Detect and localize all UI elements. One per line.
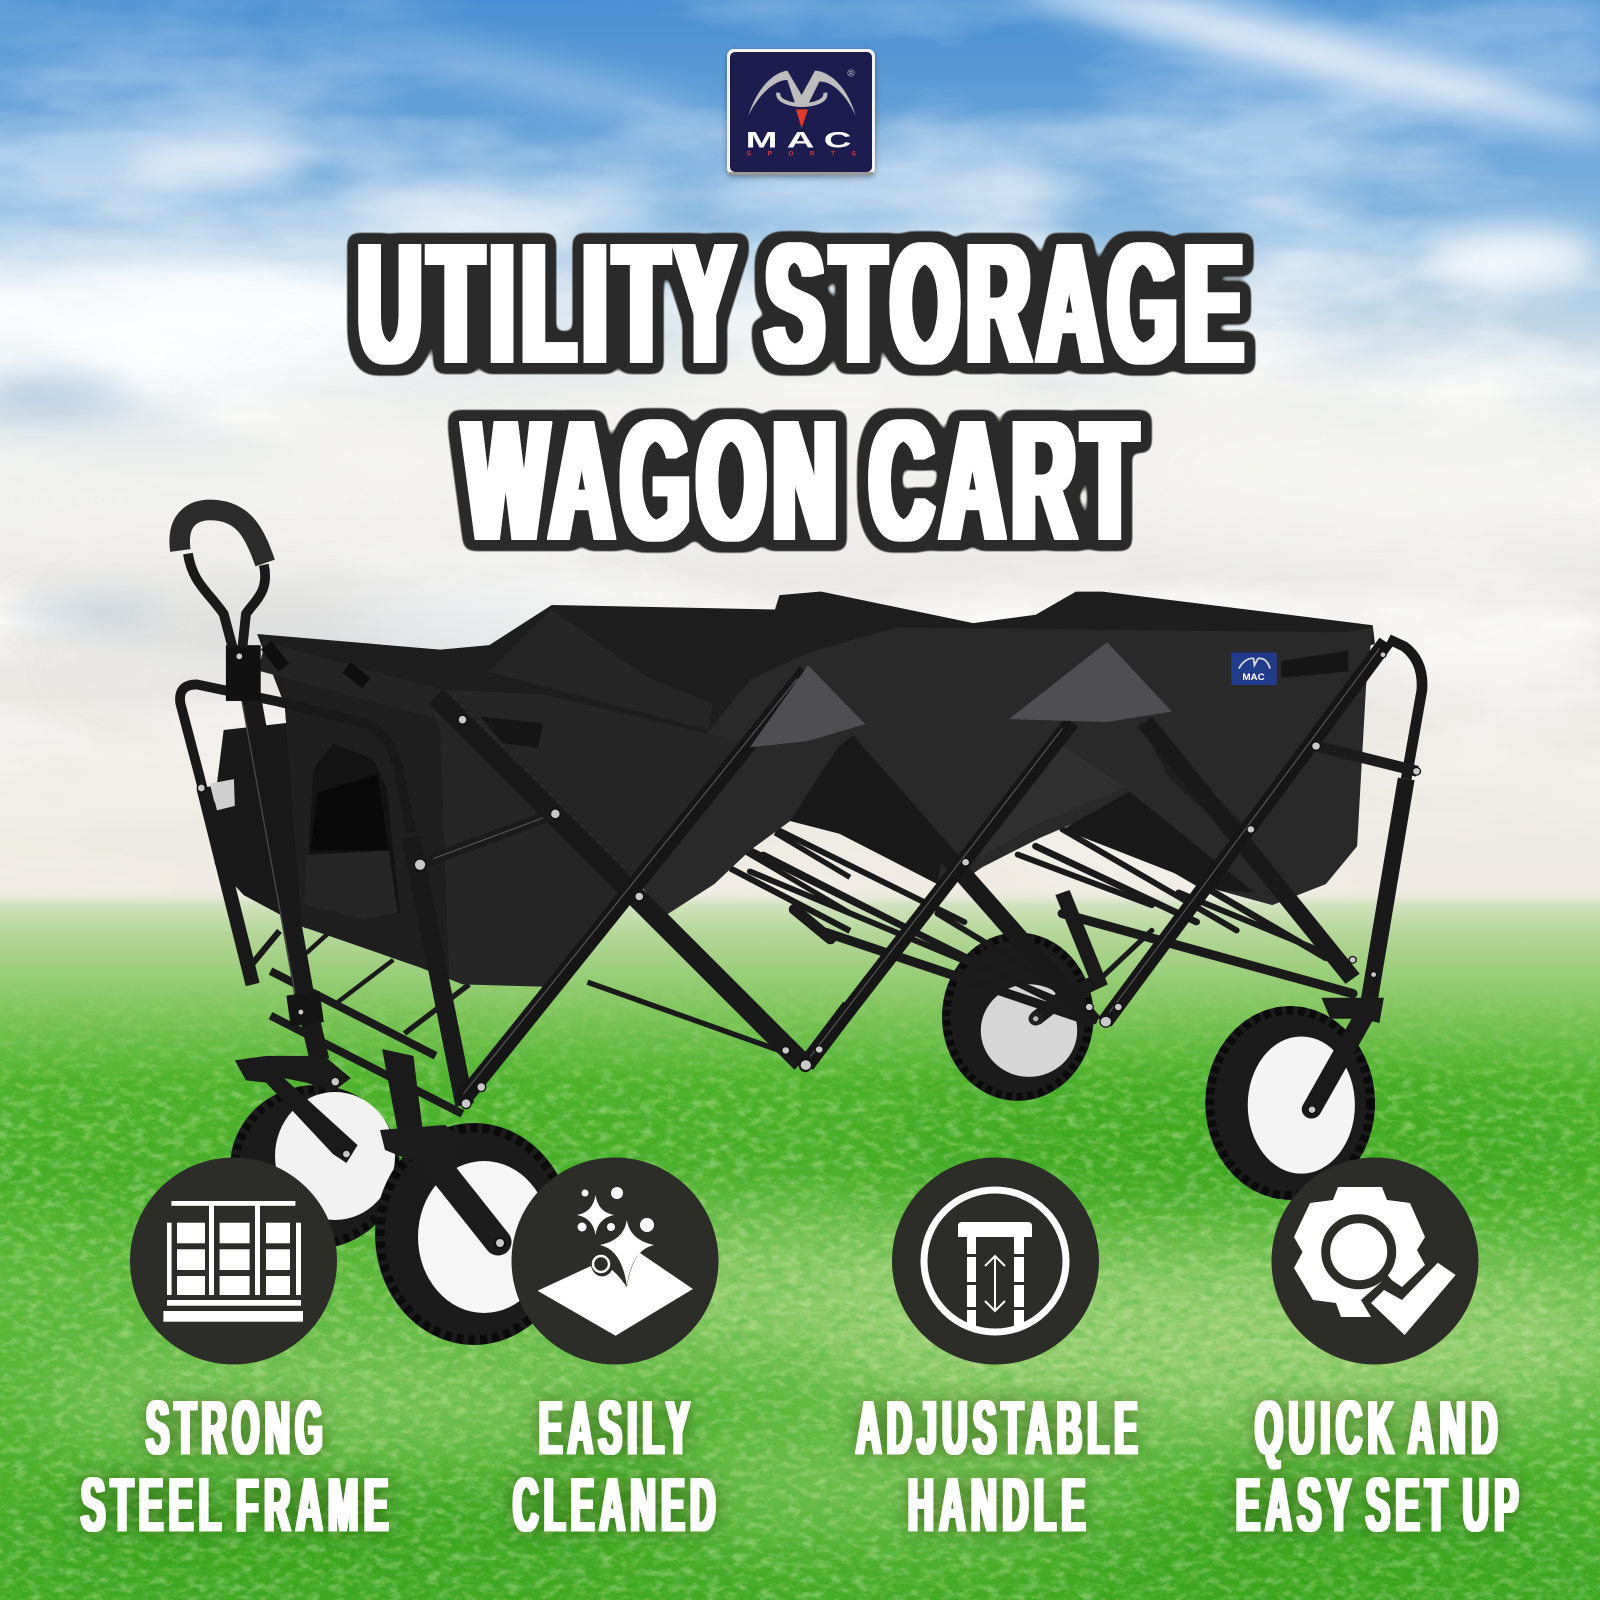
logo badge: MAC Sports: SPORTS xyxy=(747,150,857,157)
fabric bag, front wall left xyxy=(210,645,748,987)
frame bolts xyxy=(197,653,823,1109)
undercarriage rails, right xyxy=(750,817,1353,1021)
MAC fabric tag: MAC xyxy=(1242,672,1265,683)
MAC fabric tag xyxy=(1231,653,1277,685)
rear left wheel xyxy=(230,1085,400,1249)
steel frame, right section xyxy=(782,639,1422,1071)
background: sky with clouds xyxy=(0,0,1600,960)
fabric bag, far wall right xyxy=(781,592,1375,686)
icon: gear with magnifier and check xyxy=(1272,1158,1478,1364)
undercarriage rails, left xyxy=(248,833,850,1114)
side mesh pocket xyxy=(304,743,400,920)
background: grass field xyxy=(0,890,1600,1600)
label: STRONG xyxy=(146,1386,328,1471)
feature: adjustable handle xyxy=(856,1158,1143,1548)
handle grip xyxy=(180,510,265,563)
label xyxy=(81,1386,394,1548)
rear left caster fork xyxy=(235,1049,423,1163)
text: ADJUSTABLE xyxy=(856,1386,1143,1471)
feature: strong steel frame xyxy=(81,1158,394,1548)
logo badge: MAC Sports: ® xyxy=(847,69,855,80)
rear mesh pocket xyxy=(210,721,306,929)
label xyxy=(856,1386,1143,1548)
logo badge: MAC Sports xyxy=(727,49,875,175)
label xyxy=(513,1386,721,1548)
icon: telescopic handle xyxy=(892,1158,1099,1364)
telescopic handle pole xyxy=(246,667,320,1060)
grey corner flaps xyxy=(750,642,1172,747)
steel frame, left section xyxy=(180,510,850,1109)
rear right wheel xyxy=(942,893,1098,1101)
scissor bars xyxy=(436,697,802,1063)
feature: quick and easy set up xyxy=(1236,1158,1524,1548)
title xyxy=(358,209,1250,576)
fabric bag, front wall right xyxy=(643,627,1373,916)
top rail with strap xyxy=(262,656,436,703)
label: EASILY xyxy=(539,1386,695,1471)
icon: steel frame xyxy=(130,1158,337,1364)
logo badge: MAC Sports: MAC xyxy=(746,127,861,152)
text: STEEL FRAME xyxy=(81,1463,394,1548)
front leg xyxy=(411,837,465,1105)
folding wagon cart xyxy=(180,510,1422,1345)
icon: sparkling clean surface xyxy=(512,1158,718,1364)
front right wheel xyxy=(1205,998,1384,1200)
fabric bag, far wall left xyxy=(257,592,850,792)
front left wheel xyxy=(375,1123,573,1345)
label: HANDLE xyxy=(908,1463,1091,1548)
rear U frame xyxy=(180,684,411,984)
feature: easily cleaned xyxy=(512,1158,721,1548)
handle tubes xyxy=(188,554,233,647)
label xyxy=(1236,1386,1524,1548)
right U frame xyxy=(1388,639,1422,779)
text: CLEANED xyxy=(513,1463,721,1548)
